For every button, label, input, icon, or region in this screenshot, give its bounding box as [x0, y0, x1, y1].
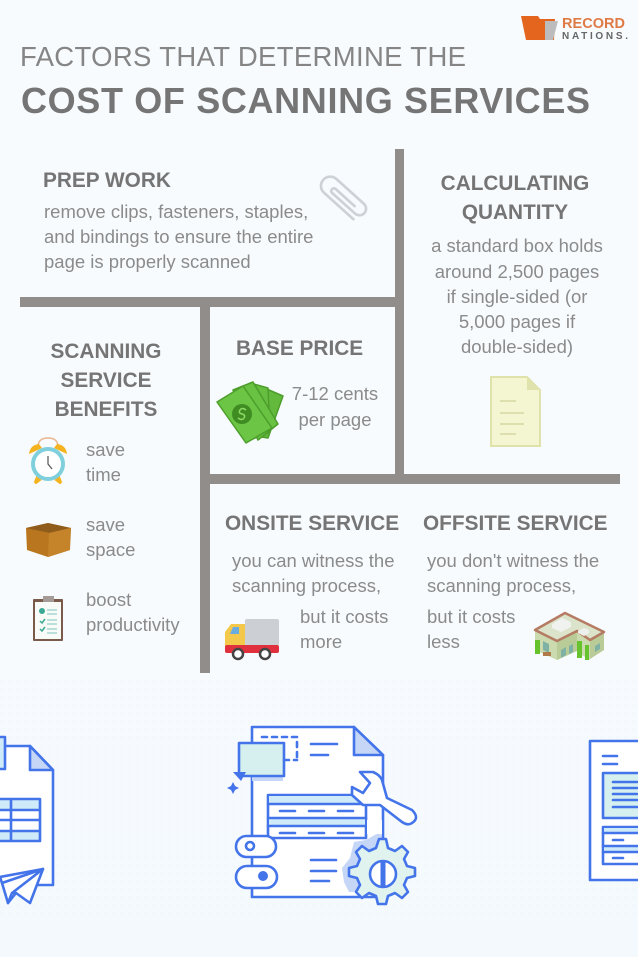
title [20, 41, 590, 121]
panel: onsite service: more [300, 631, 342, 652]
title: COST OF SCANNING SERVICES [21, 80, 590, 121]
icon: truck [225, 619, 279, 659]
illustration: left document [0, 737, 53, 903]
icon: document [491, 377, 540, 446]
panel: offsite service: you don't witness the [427, 550, 599, 571]
panel: scanning service benefits: save [86, 514, 125, 535]
panel: calculating quantity: 5,000 pages if [459, 311, 576, 332]
icon: money [217, 382, 283, 443]
panel: prep work: remove clips, fasteners, staples, [44, 201, 308, 222]
panel: scanning service benefits: SERVICE [61, 369, 152, 392]
panel: onsite service [225, 512, 399, 659]
panel: scanning service benefits: boost [86, 589, 131, 610]
icon: paperclip [317, 173, 369, 222]
icon: building [535, 613, 604, 660]
panel: calculating quantity [431, 172, 603, 446]
panel: calculating quantity: around 2,500 pages [435, 261, 599, 282]
panel: offsite service: less [427, 631, 460, 652]
panel: offsite service: OFFSITE SERVICE [423, 512, 608, 535]
panel: prep work [43, 169, 369, 272]
icon: box [26, 523, 71, 557]
panel: calculating quantity: CALCULATING [441, 172, 589, 195]
panel: calculating quantity: double-sided) [461, 336, 573, 357]
logo: Record Nations: NATIONS. [562, 31, 628, 42]
illustration: right document [590, 741, 638, 880]
panel: prep work: page is properly scanned [44, 251, 251, 272]
panel: onsite service: but it costs [300, 606, 388, 627]
panel: scanning service benefits: save [86, 439, 125, 460]
panel: onsite service: scanning process, [232, 575, 381, 596]
panel: calculating quantity: QUANTITY [462, 201, 568, 224]
panel: scanning service benefits: productivity [86, 614, 180, 635]
panel: scanning service benefits: time [86, 464, 121, 485]
panel: prep work: and bindings to ensure the entire [44, 226, 313, 247]
icon: alarm clock [29, 438, 67, 483]
background pattern [0, 680, 638, 957]
panel: base price [217, 337, 378, 443]
logo: Record Nations [521, 16, 628, 42]
panel: prep work: PREP WORK [43, 169, 171, 192]
panel: scanning service benefits [26, 340, 180, 641]
title: FACTORS THAT DETERMINE THE [20, 41, 466, 72]
panel: onsite service: ONSITE SERVICE [225, 512, 399, 535]
illustration: document with tools [227, 727, 416, 904]
dividers [20, 149, 620, 673]
panel: base price: 7-12 cents [292, 383, 378, 404]
logo: Record Nations: RECORD [562, 16, 625, 32]
panel: onsite service: you can witness the [232, 550, 394, 571]
panel: offsite service [423, 512, 608, 660]
panel: offsite service: but it costs [427, 606, 515, 627]
panel: offsite service: scanning process, [427, 575, 576, 596]
panel: base price: BASE PRICE [236, 337, 363, 360]
panel: scanning service benefits: space [86, 539, 135, 560]
panel: scanning service benefits: SCANNING [51, 340, 161, 363]
panel: base price: per page [298, 409, 372, 430]
icon: clipboard [33, 596, 63, 641]
panel: calculating quantity: if single-sided (or [447, 286, 587, 307]
panel: scanning service benefits: BENEFITS [55, 398, 158, 421]
panel: calculating quantity: a standard box holds [431, 235, 603, 256]
